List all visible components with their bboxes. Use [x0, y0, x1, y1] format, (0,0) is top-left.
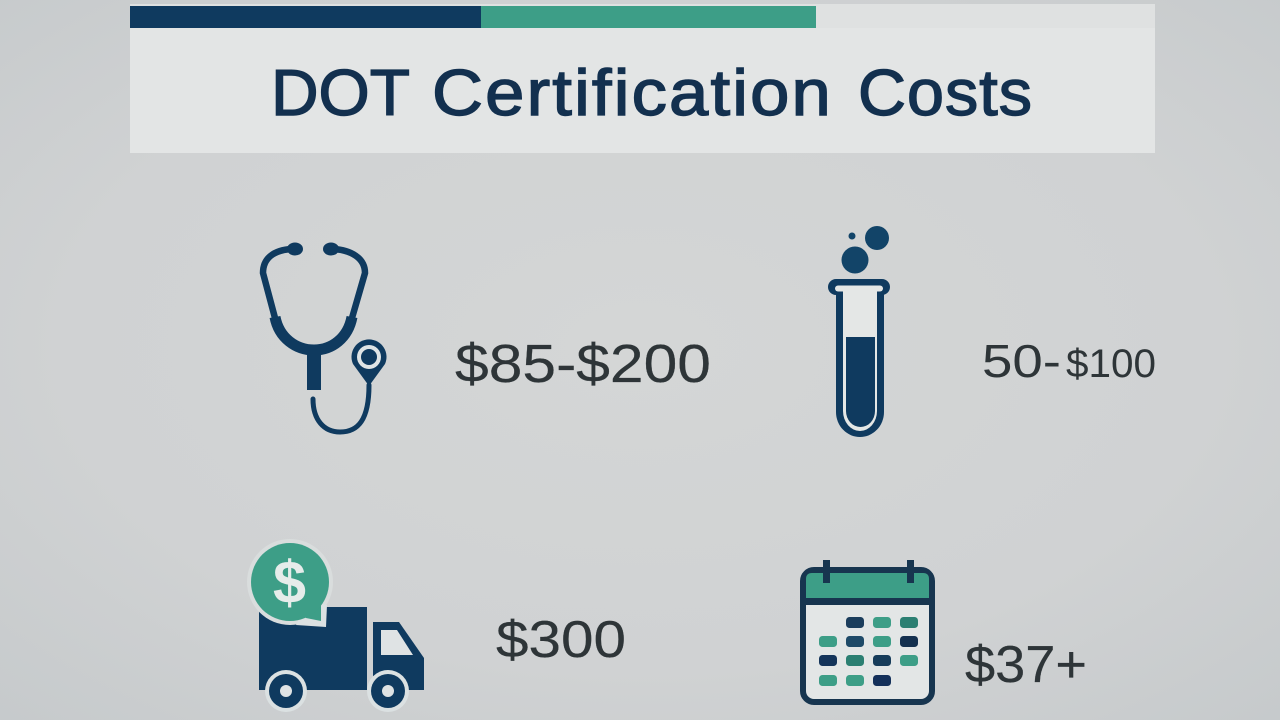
icon: stethoscope [263, 242, 386, 432]
icon: truck with dollar badge [247, 539, 424, 712]
price: truck: $300 [496, 611, 626, 669]
progress bar: green segment [481, 6, 816, 28]
header panel [130, 4, 1155, 153]
price: drug test: 50- [982, 335, 1061, 387]
icon: test tube [828, 226, 890, 437]
icon: calendar [803, 560, 932, 702]
title: Certification [432, 56, 833, 129]
price: calendar: $37+ [965, 636, 1087, 694]
price: physical exam: $85-$200 [455, 334, 711, 394]
title: DOT [271, 56, 410, 129]
title: Costs [858, 56, 1033, 129]
price: drug test [982, 335, 1156, 387]
title [271, 56, 1033, 129]
dollar sign: $ [273, 549, 306, 616]
progress bar: navy segment [130, 6, 481, 28]
price: drug test: $100 [1066, 342, 1156, 386]
